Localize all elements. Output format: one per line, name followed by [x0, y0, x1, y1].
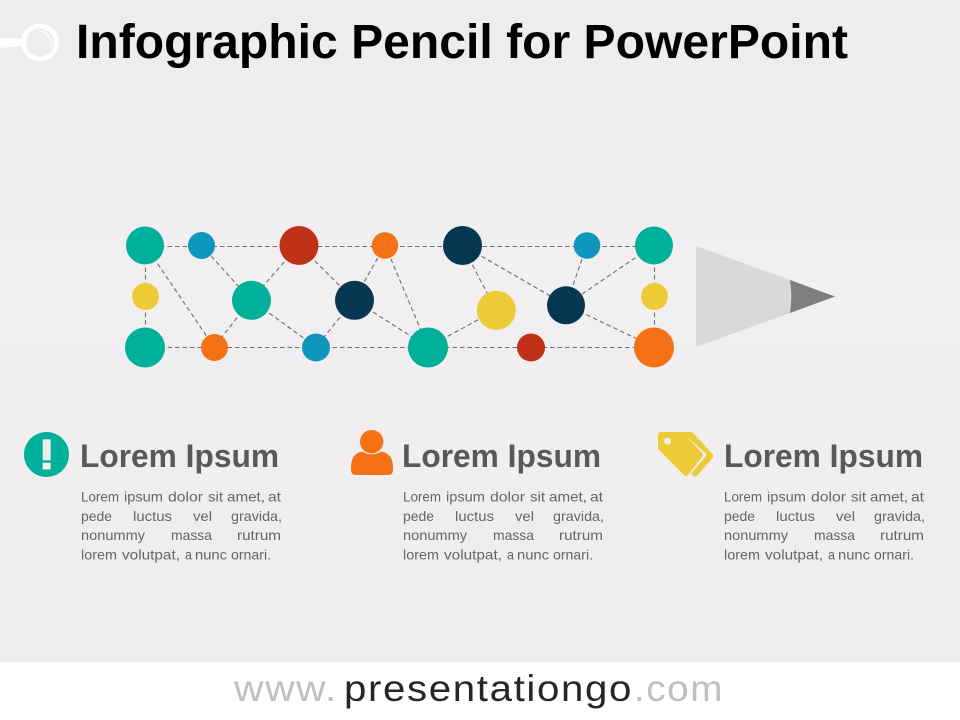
icon: title pin ring: [0, 26, 56, 59]
pencil tip: [696, 246, 835, 347]
body text: nonummy: [724, 527, 788, 543]
title: Infographic Pencil for PowerPoint: [76, 16, 848, 69]
body text: dolor: [168, 489, 203, 505]
heading: Lorem Ipsum: [402, 438, 601, 474]
body text: gravida,: [874, 508, 925, 524]
footer website url: .com: [634, 668, 724, 709]
body text: pede: [81, 508, 112, 524]
body text: massa: [493, 527, 534, 543]
footer website url: www.: [233, 668, 338, 709]
body text: amet,: [870, 489, 908, 505]
body text: at: [268, 489, 281, 505]
body text: massa: [814, 527, 855, 543]
body text: luctus: [455, 508, 494, 524]
body text: pede: [724, 508, 755, 524]
body text: vel: [515, 508, 534, 524]
body text: rutrum: [559, 527, 603, 543]
panel: column two: [351, 430, 604, 562]
body text: [81, 489, 282, 562]
body text: Lorem: [81, 489, 119, 505]
body text: sit: [208, 489, 223, 505]
body text: dolor: [811, 489, 846, 505]
body text: vel: [836, 508, 855, 524]
body text: dolor: [490, 489, 525, 505]
body text: sit: [851, 489, 866, 505]
body text: sit: [530, 489, 545, 505]
body text: at: [911, 489, 924, 505]
body text: ornari.: [231, 546, 271, 562]
body text: nunc: [838, 546, 870, 562]
icon: price tags: [658, 432, 713, 477]
panel: column three: [658, 432, 925, 562]
body text: a: [185, 546, 192, 562]
icon: person: [351, 430, 393, 475]
body text: Lorem: [403, 489, 441, 505]
network nodes: [125, 226, 674, 368]
body text: lorem: [403, 546, 439, 562]
body text: nonummy: [81, 527, 145, 543]
body text: nunc: [517, 546, 549, 562]
body text: at: [590, 489, 603, 505]
body text: massa: [171, 527, 212, 543]
pencil network diagram: [125, 226, 835, 368]
body text: rutrum: [880, 527, 924, 543]
body text: ornari.: [874, 546, 914, 562]
body text: ornari.: [553, 546, 593, 562]
heading: Lorem Ipsum: [80, 438, 279, 474]
network dashed connectors: [145, 245, 654, 348]
body text: ipsum: [767, 489, 806, 505]
footer website url: presentationgo: [344, 668, 633, 709]
body text: nunc: [195, 546, 227, 562]
body text: amet,: [227, 489, 265, 505]
body text: nonummy: [403, 527, 467, 543]
body text: volutpat,: [765, 546, 823, 562]
body text: gravida,: [231, 508, 282, 524]
heading: Lorem Ipsum: [724, 438, 923, 474]
body text: vel: [193, 508, 212, 524]
body text: [403, 489, 604, 562]
body text: luctus: [776, 508, 815, 524]
body text: ipsum: [446, 489, 485, 505]
body text: lorem: [724, 546, 760, 562]
body text: a: [507, 546, 514, 562]
body text: lorem: [81, 546, 117, 562]
body text: volutpat,: [444, 546, 502, 562]
body text: amet,: [549, 489, 587, 505]
body text: volutpat,: [122, 546, 180, 562]
body text: gravida,: [553, 508, 604, 524]
body text: Lorem: [724, 489, 762, 505]
panel: column one: [24, 432, 282, 562]
body text: a: [828, 546, 835, 562]
body text: rutrum: [237, 527, 281, 543]
body text: pede: [403, 508, 434, 524]
body text: [724, 489, 925, 562]
body text: ipsum: [124, 489, 163, 505]
body text: luctus: [133, 508, 172, 524]
icon: exclamation circle: [24, 432, 69, 477]
footer website url: [233, 668, 724, 709]
